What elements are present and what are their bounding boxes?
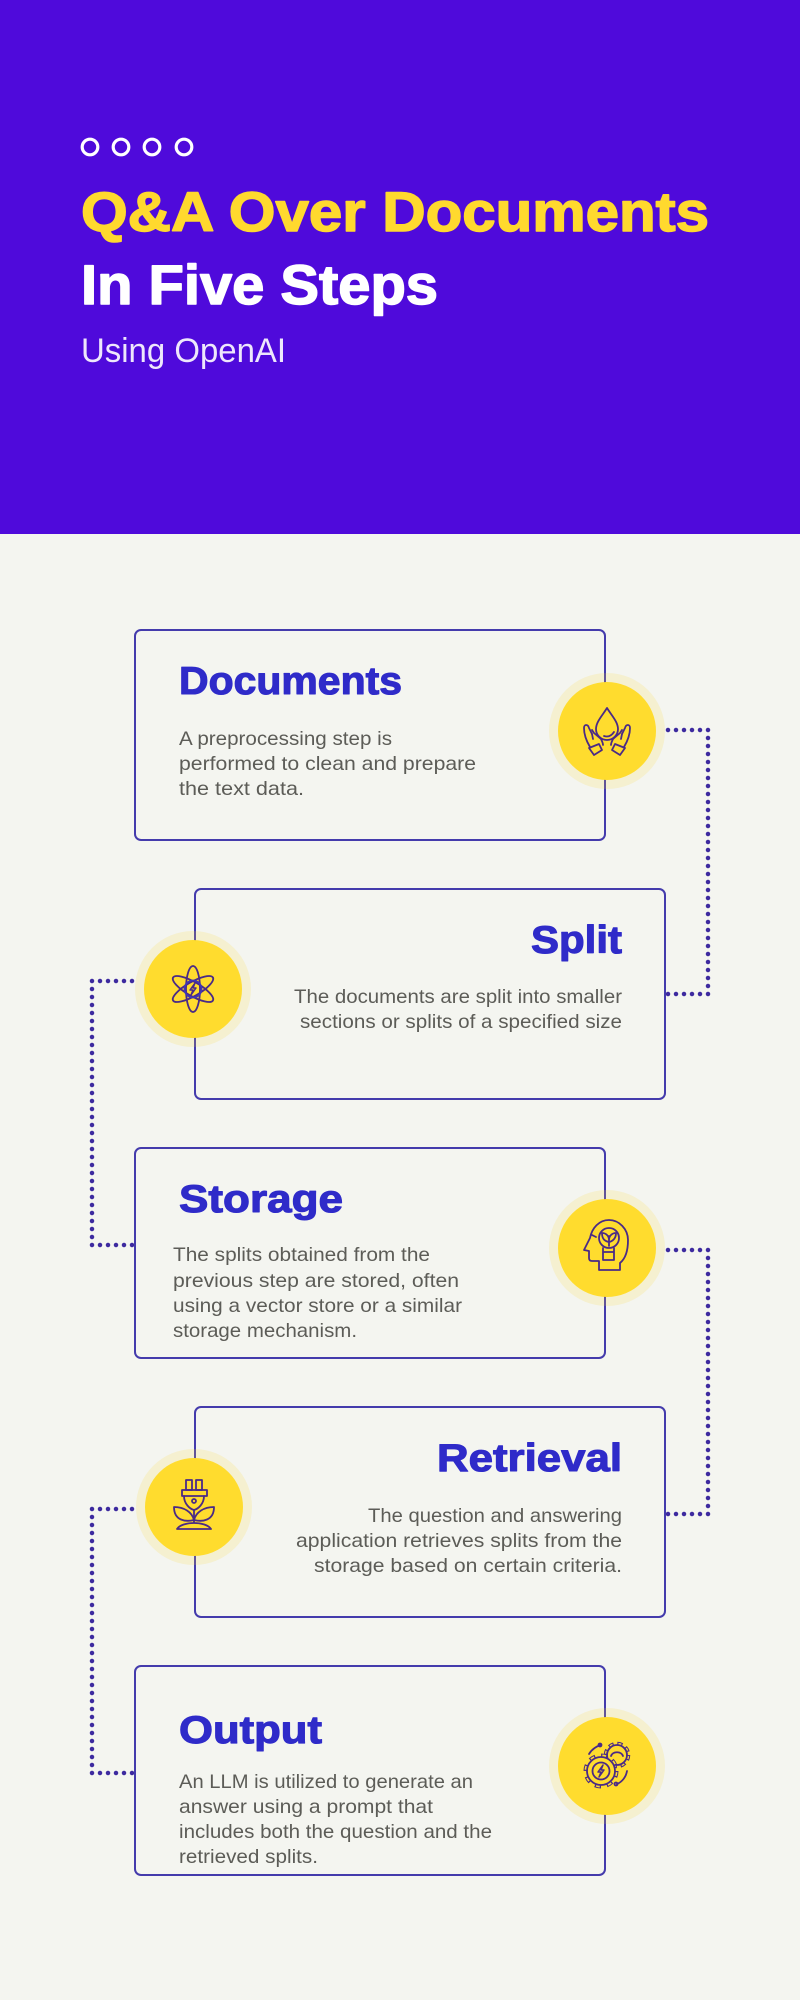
text: storage description: The splits obtained from the — [173, 1244, 430, 1266]
text: retrieval description — [296, 1505, 622, 1577]
icon: gears — [549, 1708, 665, 1824]
icon: head with light bulb — [549, 1190, 665, 1306]
heading: retrieval: Retrieval — [437, 1437, 622, 1480]
text: retrieval description: The question and answering — [368, 1505, 622, 1527]
panel: documents — [135, 630, 665, 840]
connector: retrieval to output — [92, 1509, 133, 1773]
connector: storage to retrieval — [667, 1250, 708, 1514]
text: storage description: storage mechanism. — [173, 1320, 357, 1342]
text: documents description: the text data. — [179, 778, 304, 800]
text: retrieval description: application retrieves splits from the — [296, 1530, 622, 1552]
text: retrieval description: storage based on certain criteria. — [314, 1555, 622, 1577]
heading: documents: Documents — [179, 660, 402, 703]
text: split description — [294, 986, 623, 1033]
heading: split: Split — [531, 919, 622, 962]
text: output description: answer using a prompt that — [179, 1796, 434, 1818]
icon: plug with leaves — [136, 1449, 252, 1565]
text: split description: sections or splits of a specified size — [300, 1011, 622, 1033]
text: documents description — [179, 728, 476, 800]
icon: atom with bolt — [135, 931, 251, 1047]
text: split description: The documents are split into smaller — [294, 986, 623, 1008]
text: documents description: A preprocessing step is — [179, 728, 392, 750]
title line 1: Q&A Over Documents — [81, 180, 709, 243]
text: storage description: previous step are stored, often — [173, 1270, 459, 1292]
panel: storage — [135, 1148, 665, 1358]
text: output description: retrieved splits. — [179, 1846, 318, 1868]
panel: split — [135, 889, 665, 1099]
text: output description — [179, 1771, 492, 1868]
four header ring dots — [82, 139, 192, 155]
header banner — [0, 0, 800, 534]
panel: retrieval — [136, 1407, 665, 1617]
connector: documents to split — [667, 730, 708, 994]
text: documents description: performed to clean and prepare — [179, 753, 476, 775]
connector: split to storage — [92, 981, 133, 1245]
text: output description: An LLM is utilized to generate an — [179, 1771, 473, 1793]
text: output description: includes both the question and the — [179, 1821, 492, 1843]
text: storage description: using a vector store or a similar — [173, 1295, 463, 1317]
title line 2: In Five Steps — [81, 253, 438, 316]
heading: storage: Storage — [179, 1178, 343, 1221]
icon: water drop in hands — [549, 673, 665, 789]
subtitle: Using OpenAI — [81, 332, 286, 370]
panel: output — [135, 1666, 665, 1875]
text: storage description — [173, 1244, 463, 1342]
heading: output: Output — [179, 1709, 322, 1752]
